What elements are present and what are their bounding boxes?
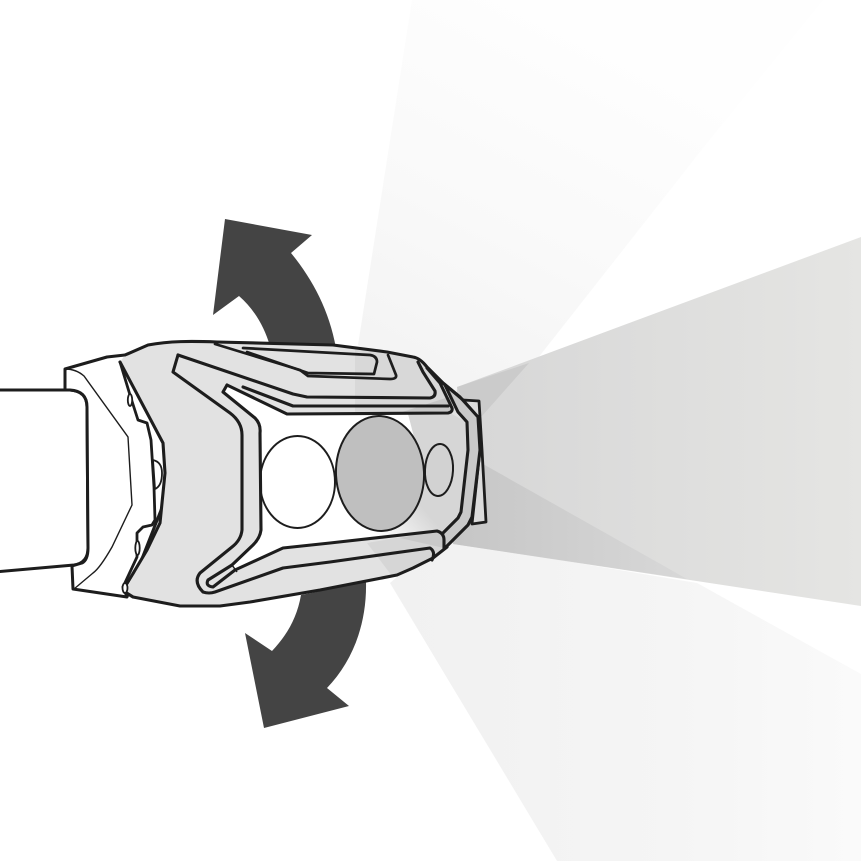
arrow: tilt up <box>213 219 336 348</box>
central narrow light beam <box>453 237 861 606</box>
dark wedge on lower arm <box>400 531 444 548</box>
lower beam overlap wedge <box>453 464 687 579</box>
upper wide light beam <box>358 0 823 400</box>
headband strap <box>0 390 88 572</box>
rear mount bracket <box>65 355 165 597</box>
shaded top section <box>355 347 452 414</box>
bezel band <box>443 383 480 548</box>
upper left arm <box>173 355 434 593</box>
arrow: tilt down <box>245 582 366 728</box>
upper beam overlap wedge <box>457 363 529 416</box>
white lens <box>260 436 335 528</box>
shaded lower arm section <box>367 531 447 576</box>
lower arm <box>207 531 444 587</box>
large grey lens <box>333 414 427 533</box>
lamp body <box>120 341 486 606</box>
grey lens surround <box>372 414 468 539</box>
white lens frame <box>223 385 468 570</box>
front plate <box>463 400 486 524</box>
rear latch details <box>120 362 162 597</box>
lower wide light beam <box>390 540 861 861</box>
small lens <box>424 443 454 497</box>
top slot <box>243 348 377 374</box>
dark wedge on top arm <box>396 396 452 414</box>
body outlines <box>120 341 480 606</box>
